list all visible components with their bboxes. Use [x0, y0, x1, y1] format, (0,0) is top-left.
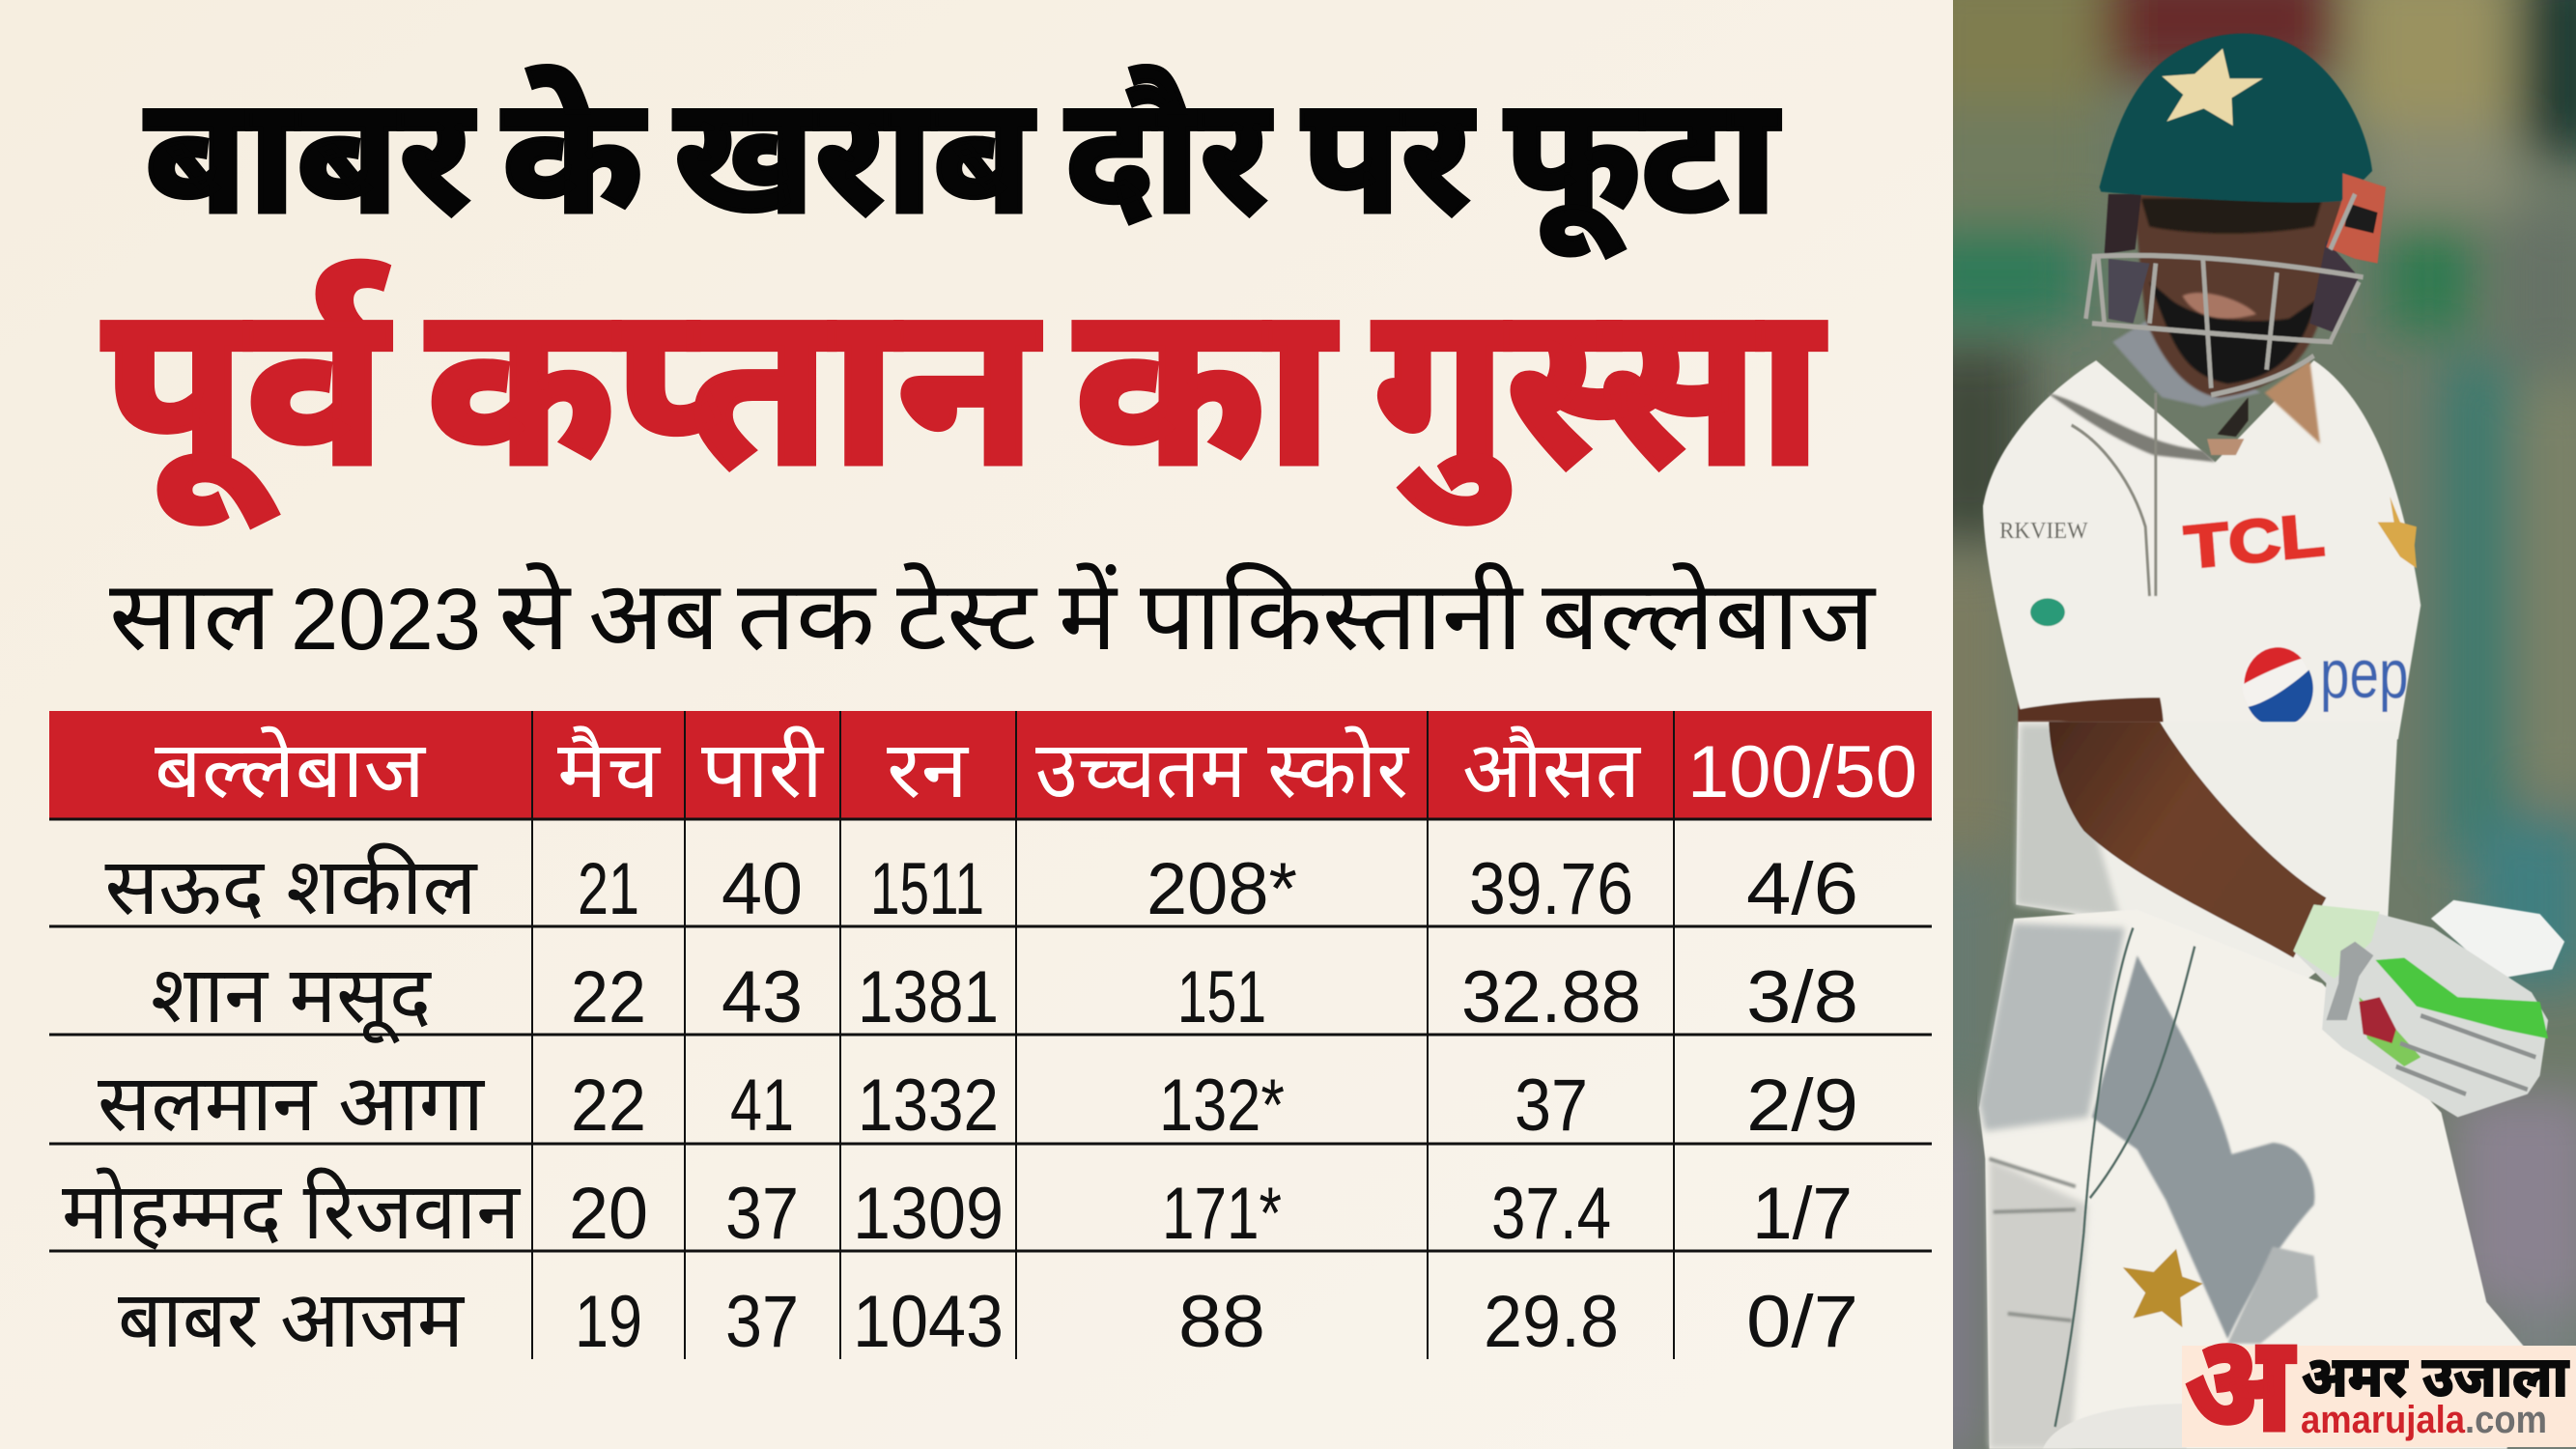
row: Babar Azam: 1043 — [853, 1281, 1004, 1363]
row: Saud Shakeel: 21 — [578, 848, 639, 930]
row: Mohammad Rizwan: 20 — [569, 1173, 648, 1255]
title line 1 — [145, 65, 1780, 257]
row: Salman Agha: 1332 — [858, 1065, 999, 1147]
helmet side guard — [2326, 173, 2386, 264]
trouser shadow — [1979, 923, 2125, 1131]
upper body (zoom coordinates) — [1983, 34, 2420, 739]
row: Salman Agha: 2/9 — [1746, 1065, 1858, 1147]
row: Shan Masood: 151 — [1177, 956, 1266, 1038]
row: Mohammad Rizwan: 1/7 — [1752, 1173, 1853, 1255]
row: Saud Shakeel: 4/6 — [1746, 848, 1858, 930]
row: Babar Azam: 19 — [575, 1281, 642, 1363]
row: Salman Agha — [98, 1060, 1858, 1148]
logo url: amarujala.com — [2301, 1399, 2547, 1441]
batting glove — [2293, 900, 2564, 1118]
row: Salman Agha: 41 — [730, 1065, 794, 1147]
table — [49, 711, 1932, 1364]
shirt — [1983, 360, 2420, 739]
subtitle — [109, 562, 1877, 670]
photo background (blurred stadium) — [1912, 0, 2576, 1449]
sleeve badge — [2030, 598, 2065, 626]
row: Salman Agha: 22 — [571, 1065, 646, 1147]
paper background — [0, 0, 1953, 1449]
subtitle: बल्लेबाज — [1542, 562, 1877, 670]
row: Salman Agha: 132* — [1159, 1065, 1285, 1147]
table grid lines — [49, 711, 1932, 1359]
row: Babar Azam: 88 — [1178, 1281, 1265, 1363]
subtitle: 2023 — [291, 572, 481, 668]
title line 2: का — [1075, 261, 1337, 511]
table header row: मैच — [557, 725, 662, 814]
row: Saud Shakeel: 208* — [1146, 848, 1297, 930]
helmet — [2100, 34, 2372, 203]
Pepsi logo: pep — [2320, 637, 2408, 713]
lower body (zoom coordinates) — [1979, 722, 2564, 1449]
title line 2 — [103, 261, 1826, 526]
row: Shan Masood: शान मसूद — [151, 952, 432, 1044]
trouser seams — [2055, 927, 2194, 1427]
row: Saud Shakeel: 39.76 — [1469, 848, 1633, 930]
subtitle: तक — [737, 562, 877, 670]
subtitle: से — [498, 562, 572, 670]
Pepsi logo — [2243, 647, 2407, 723]
title line 1: पर — [1302, 65, 1475, 246]
title line 2: गुस्सा — [1373, 261, 1826, 523]
title line 1: बाबर — [145, 65, 475, 246]
neck shadow and collar — [2047, 393, 2216, 462]
sleeve under arm — [2017, 697, 2164, 739]
sleeve sponsor: RKVIEW — [1999, 518, 2088, 544]
chest star — [2378, 497, 2417, 568]
title line 2: कप्तान — [427, 261, 1040, 511]
trouser folds — [1990, 1159, 2076, 1321]
title line 2: पूर्व — [103, 261, 390, 526]
table header row: पारी — [701, 726, 825, 814]
table header row: रन — [887, 726, 970, 814]
row: Mohammad Rizwan: 171* — [1162, 1173, 1282, 1255]
row: Mohammad Rizwan: 37 — [725, 1173, 799, 1255]
photo: cricketer Babar Azam — [1912, 0, 2576, 1449]
row: Babar Azam: 29.8 — [1484, 1281, 1619, 1363]
subtitle: पाकिस्तानी — [1140, 562, 1524, 670]
row: Saud Shakeel: 40 — [722, 848, 803, 930]
row: Saud Shakeel — [104, 842, 1858, 931]
trouser star — [2123, 1249, 2203, 1327]
row: Babar Azam — [118, 1276, 1858, 1364]
title line 1: खराब — [674, 65, 1035, 246]
forearm — [2049, 722, 2326, 958]
row: Babar Azam: 37 — [725, 1281, 799, 1363]
subtitle: साल — [109, 562, 273, 670]
row: Mohammad Rizwan — [62, 1168, 1853, 1256]
row: Shan Masood — [151, 952, 1858, 1044]
row: Saud Shakeel: 1511 — [870, 848, 984, 930]
row: Mohammad Rizwan: 1309 — [853, 1173, 1004, 1255]
row: Babar Azam: बाबर आजम — [118, 1276, 466, 1364]
Amar Ujala logo — [2182, 1343, 2576, 1447]
table header row: औसत — [1462, 726, 1641, 814]
subtitle: अब — [588, 562, 722, 670]
subtitle: में — [1059, 562, 1118, 670]
row: Mohammad Rizwan: 37.4 — [1491, 1173, 1611, 1255]
table header row — [49, 711, 1932, 819]
row: Shan Masood: 43 — [722, 956, 803, 1038]
helmet star — [2162, 48, 2263, 126]
title line 1: फूटा — [1505, 65, 1780, 257]
row: Babar Azam: 0/7 — [1746, 1281, 1858, 1363]
face — [2133, 194, 2342, 397]
table header row: बल्लेबाज — [155, 725, 426, 814]
title line 1: के — [502, 65, 646, 246]
torso — [2016, 722, 2398, 983]
sponsor TCL: TCL — [2182, 501, 2327, 582]
row: Shan Masood: 22 — [571, 956, 646, 1038]
row: Mohammad Rizwan: मोहम्मद रिजवान — [62, 1168, 521, 1256]
row: Shan Masood: 3/8 — [1746, 956, 1858, 1038]
face grill — [2086, 194, 2364, 395]
table header row: 100/50 — [1687, 731, 1917, 813]
row: Salman Agha: 37 — [1514, 1065, 1588, 1147]
row: Shan Masood: 32.88 — [1461, 956, 1641, 1038]
row: Salman Agha: सलमान आगा — [98, 1060, 486, 1148]
trousers — [1979, 909, 2526, 1449]
row: Shan Masood: 1381 — [858, 956, 999, 1038]
subtitle: टेस्ट — [896, 562, 1038, 670]
logo hindi name: अमर उजाला — [2302, 1346, 2569, 1408]
table header row: उच्चतम स्कोर — [1035, 726, 1409, 814]
row: Saud Shakeel: सऊद शकील — [104, 842, 478, 931]
title line 1: दौर — [1065, 65, 1272, 246]
